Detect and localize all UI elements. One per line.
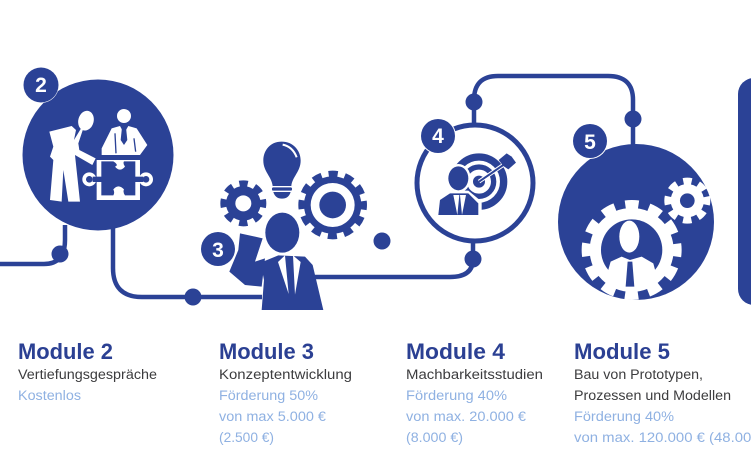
text: module 2: Vertiefungsgespräche [18,367,157,382]
text: module 2: Kostenlos [18,388,81,403]
text: module 4: Förderung 40% [406,388,507,403]
text: module 3: (2.500 €) [219,430,274,445]
icon: person [261,213,323,310]
icon: large gear [302,174,363,236]
icon: large white gear [586,204,677,296]
module 4 icon: target and person [417,118,533,241]
text: module 4 [406,339,543,445]
text: module 2 [18,339,157,403]
right panel [738,78,751,305]
module 5 icon: person in gear [558,123,714,300]
module 3 icon: person with gears and light bulb: 3 [212,239,224,262]
icon: small gear [224,184,262,222]
icon: paper [229,233,265,287]
text: module 4: (8.000 €) [406,430,463,445]
module 5 icon: person in gear: 5 [584,131,596,154]
icon: small white gear [669,182,706,219]
text: module 5: Förderung 40% [574,409,674,424]
icon: light bulb [263,142,301,199]
text: module 4: Machbarkeitsstudien [406,367,543,382]
module 4 icon: target and person: 4 [432,125,444,148]
text: module 3 [219,339,352,445]
connector: lines and nodes [0,76,642,306]
text: module 5: Prozessen und Modellen [574,388,731,403]
text: module 5 [574,339,751,445]
text: module 3: Konzeptentwicklung [219,367,352,382]
text: module 3: Förderung 50% [219,388,318,403]
module 2 icon: handshake over puzzle: 2 [35,74,47,97]
icon: person [607,221,656,287]
module 3 icon: person with gears and light bulb [200,142,363,310]
text: module 3: Module 3 [219,339,314,364]
text: module 4: von max. 20.000 € [406,409,527,424]
text: module 3: von max 5.000 € [219,409,327,424]
module 2 icon: handshake over puzzle [22,67,174,230]
text: module 4: Module 4 [406,339,505,364]
text: module 2: Module 2 [18,339,113,364]
text: module 5: Bau von Prototypen, [574,367,703,382]
text: module 5: Module 5 [574,339,670,364]
